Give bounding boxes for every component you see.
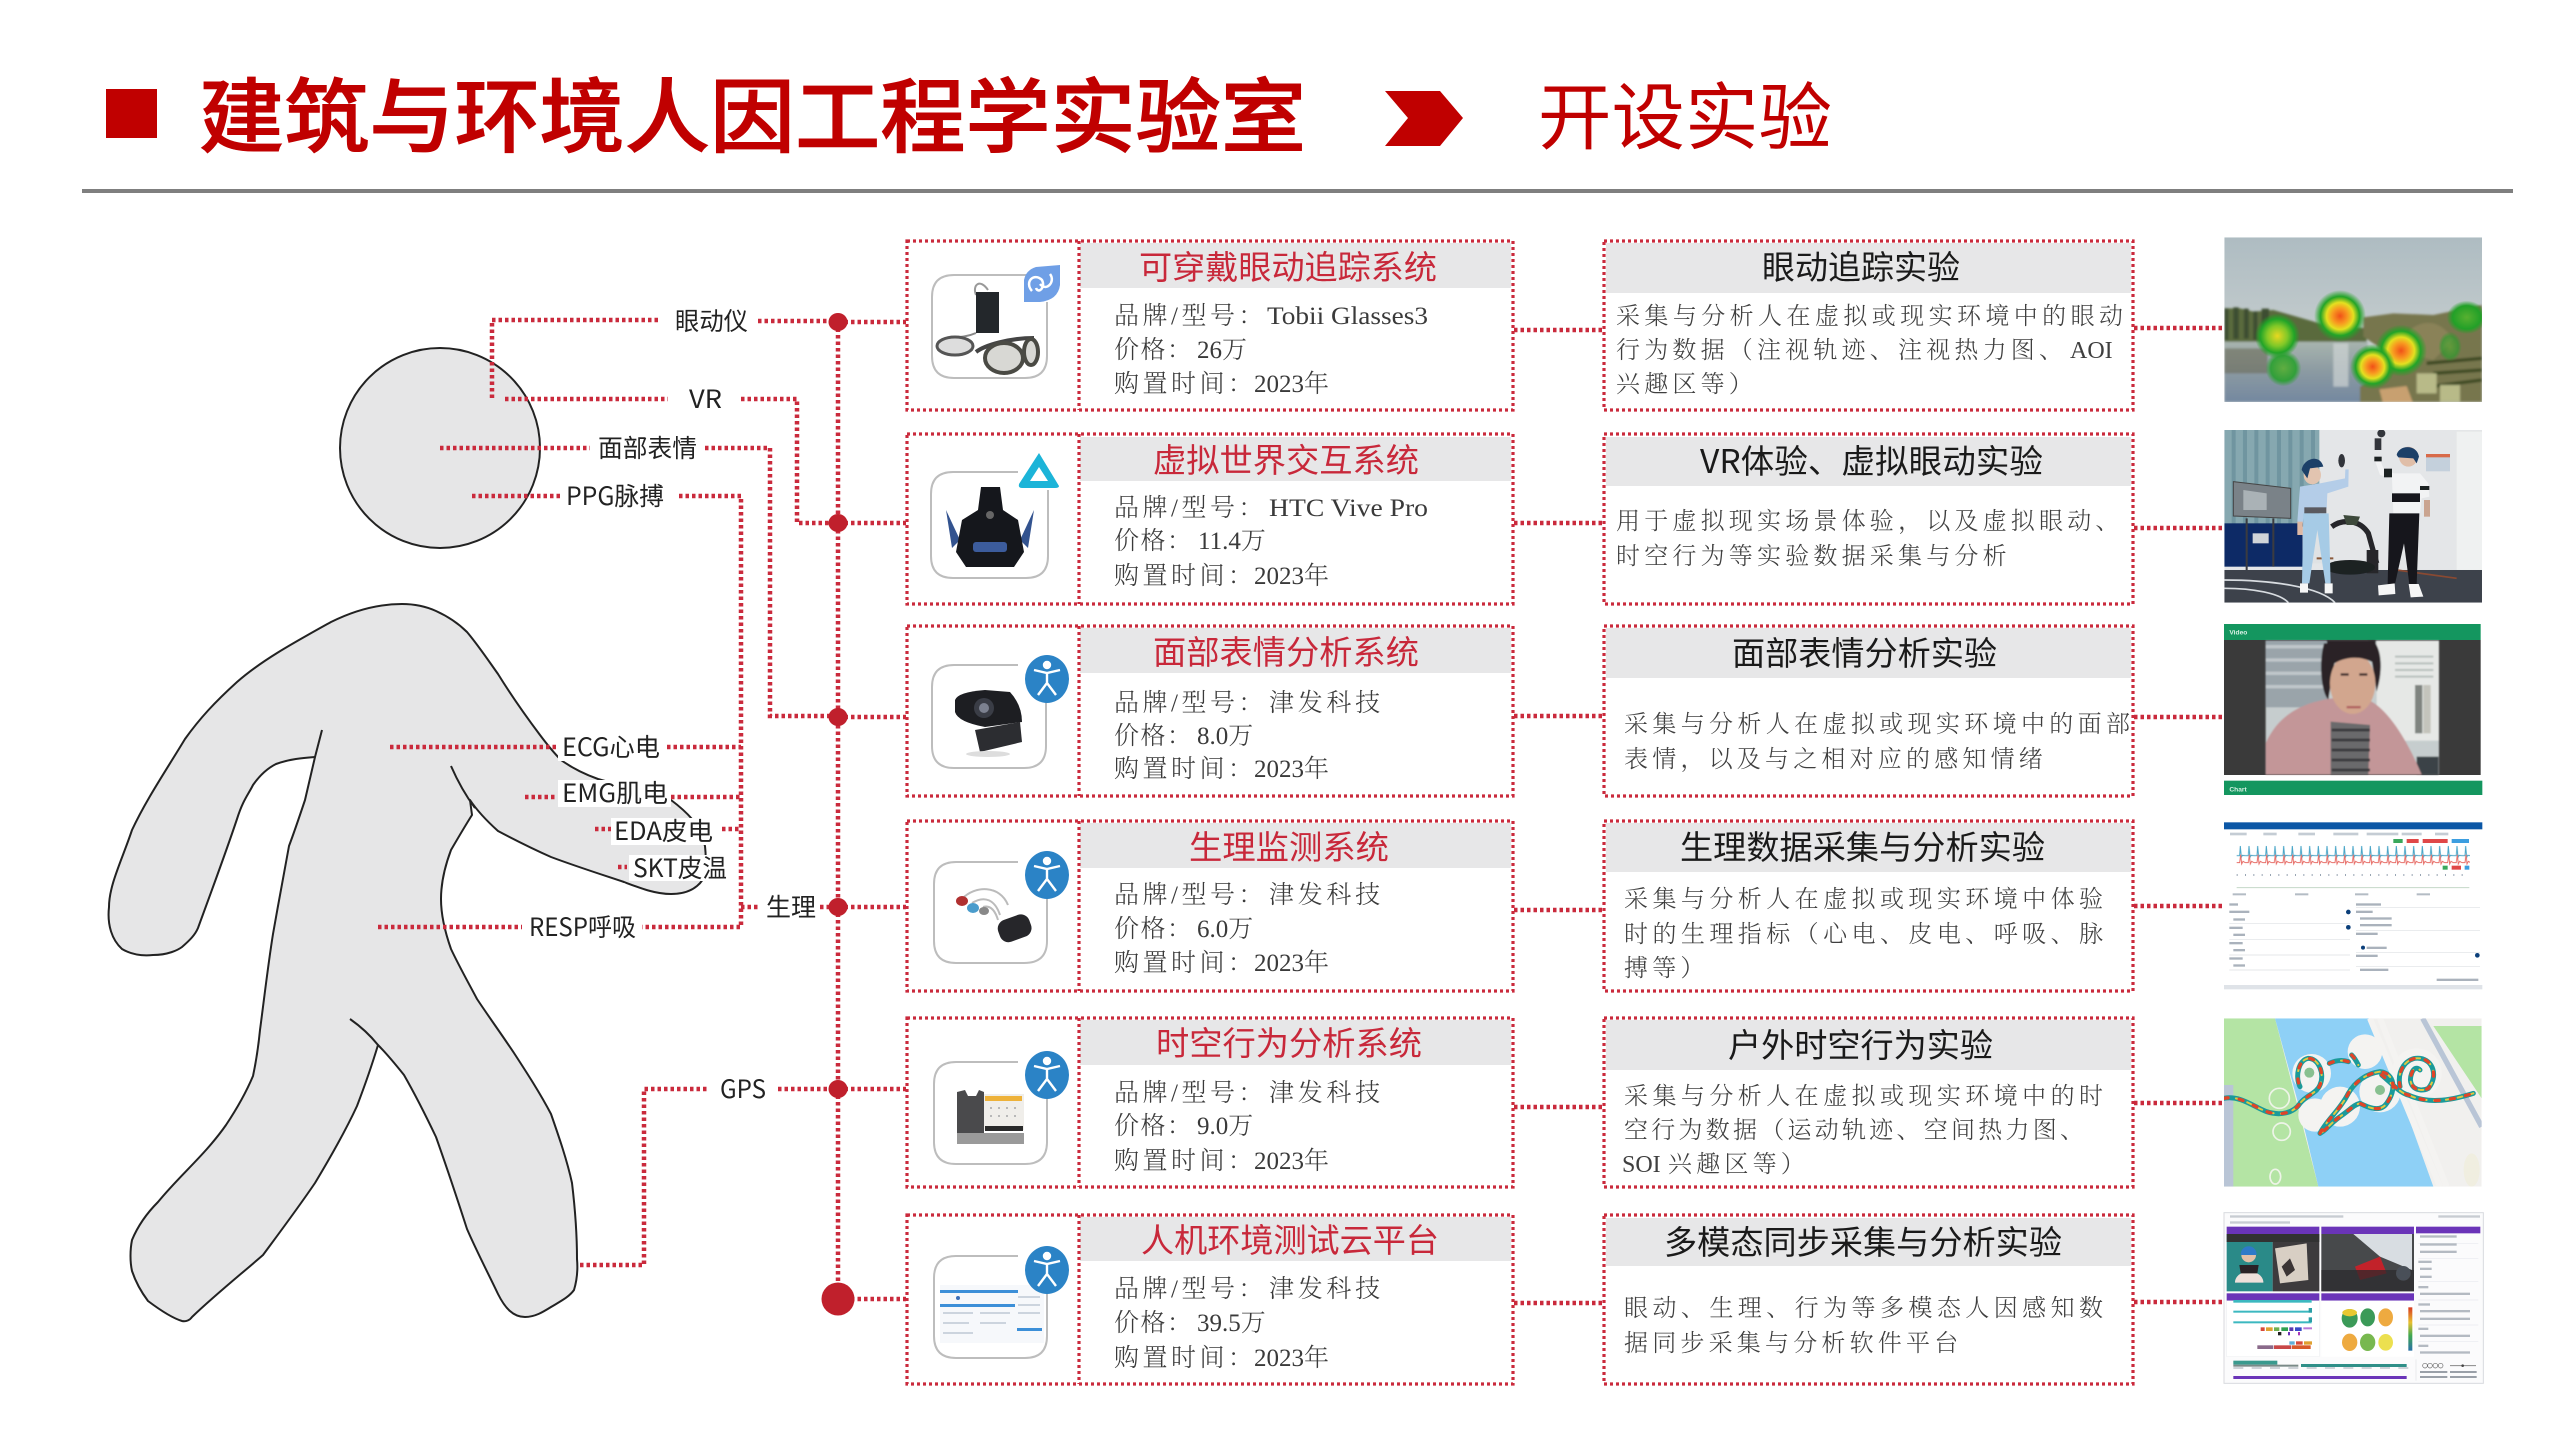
experiment 1 description: 兴趣区等） — [1616, 371, 1757, 398]
device 2 title: 虚拟世界交互系统 — [1153, 434, 1419, 482]
device 4 specs: 2023年 — [1254, 949, 1329, 977]
experiment 1 heading: 眼动追踪实验 — [1762, 241, 1960, 289]
device 1 specs: 品牌/型号： — [1114, 302, 1267, 330]
arm and leg inner lines — [315, 730, 475, 1045]
experiment 5 description: SOI — [1622, 1152, 1661, 1178]
sensor labels: 眼动仪 — [675, 302, 748, 338]
icon: data logger box — [934, 1062, 1047, 1164]
experiment 3 heading: 面部表情分析实验 — [1732, 627, 1997, 675]
device 2 specs: HTC Vive Pro — [1269, 495, 1428, 522]
subtitle: 开设实验 — [1538, 59, 1832, 165]
device 2 specs: 品牌/型号： — [1114, 494, 1267, 522]
image: GPS trajectory map — [2224, 1018, 2482, 1187]
device 1 specs: 价格： — [1114, 336, 1194, 364]
experiment 3 description — [1624, 711, 2130, 773]
device 5 specs: 品牌/型号： — [1114, 1079, 1267, 1107]
device 2 specs: 2023年 — [1254, 562, 1329, 590]
experiment 5 description: 采集与分析人在虚拟或现实环境中的时 — [1624, 1083, 2103, 1110]
screenshot captions: Video — [2229, 630, 2247, 637]
device 6 specs: 39.5万 — [1197, 1310, 1266, 1337]
device 5 specs: 价格： — [1114, 1112, 1194, 1140]
device 3 specs — [1114, 689, 1384, 783]
title bullet square — [106, 89, 157, 138]
device 6 specs: 购置时间： — [1114, 1344, 1257, 1372]
image: facial expression screenshot — [2224, 624, 2482, 795]
device 4 specs: 津发科技 — [1269, 881, 1384, 909]
panel: device 5 spatiotemporal — [907, 1017, 1513, 1187]
device 4 specs: 购置时间： — [1114, 949, 1257, 977]
experiment 1 description: 行为数据（注视轨迹、注视热力图、 — [1616, 337, 2067, 364]
device 1 specs: 购置时间： — [1114, 370, 1257, 398]
experiment 4 heading: 生理数据采集与分析实验 — [1680, 821, 2045, 869]
experiment 2 description: 用于虚拟现实场景体验，以及虚拟眼动、 — [1616, 508, 2124, 535]
device 3 title: 面部表情分析系统 — [1153, 626, 1419, 674]
sensor labels: EDA皮电 — [614, 812, 713, 848]
sensor labels — [529, 302, 816, 1106]
experiment 5 description: 空行为数据（运动轨迹、空间热力图、 — [1624, 1117, 2084, 1144]
panel: device 6 cloud platform — [907, 1214, 1513, 1384]
human body silhouette — [109, 348, 706, 1321]
screenshot captions: Chart — [2229, 786, 2247, 793]
experiment 6 description — [1624, 1295, 2103, 1357]
white label backgrounds — [558, 735, 727, 881]
title divider — [82, 189, 2513, 193]
woman — [2297, 469, 2349, 523]
device 4 title: 生理监测系统 — [1189, 821, 1389, 869]
panel: experiment 5 outdoor — [1604, 1018, 2133, 1187]
experiment 3 description: 采集与分析人在虚拟或现实环境中的面部 — [1624, 711, 2130, 738]
device 6 specs: 品牌/型号： — [1114, 1275, 1267, 1303]
sensor labels: RESP呼吸 — [529, 908, 636, 944]
device 4 specs — [1114, 881, 1384, 977]
panel: experiment 2 VR — [1604, 434, 2133, 604]
device 4 specs: 价格： — [1114, 915, 1194, 943]
panel: device 4 physiological — [907, 821, 1513, 991]
sensor labels: 面部表情 — [598, 429, 697, 465]
device 5 specs — [1114, 1079, 1384, 1175]
experiment 4 description: 时的生理指标（心电、皮电、呼吸、脉 — [1624, 921, 2103, 948]
device 3 specs: 购置时间： — [1114, 755, 1257, 783]
panel: device 1 eye tracker — [907, 241, 1513, 410]
device 6 specs — [1114, 1275, 1384, 1372]
title: 建筑与环境人因工程学实验室 — [199, 53, 1306, 170]
icon: blue link badge — [1024, 265, 1060, 302]
experiment 2 heading: VR体验、虚拟眼动实验 — [1700, 435, 2043, 483]
device 5 specs: 购置时间： — [1114, 1147, 1257, 1175]
device 5 specs: 2023年 — [1254, 1147, 1329, 1175]
icon: physiological sensors — [934, 862, 1047, 963]
icon: human badge — [1025, 851, 1069, 899]
experiment 4 description: 采集与分析人在虚拟或现实环境中体验 — [1624, 886, 2103, 913]
device 1 specs: 2023年 — [1254, 370, 1329, 398]
device 3 specs: 2023年 — [1254, 755, 1329, 783]
device 6 specs: 价格： — [1114, 1309, 1194, 1337]
device 4 specs: 品牌/型号： — [1114, 881, 1267, 909]
panel: device 3 facial expression — [907, 626, 1513, 796]
device 3 specs: 津发科技 — [1269, 689, 1384, 717]
icon: human badge — [1025, 655, 1069, 703]
panel: device 2 VR — [907, 434, 1513, 604]
panel: experiment 4 physiological — [1604, 821, 2133, 991]
experiment 5 description — [1622, 1083, 2103, 1178]
man — [2375, 462, 2429, 513]
experiment 1 description — [1616, 303, 2123, 398]
experiment 6 heading: 多模态同步采集与分析实验 — [1664, 1216, 2062, 1264]
sensor labels: 生理 — [766, 888, 816, 924]
device 5 specs: 9.0万 — [1197, 1113, 1253, 1140]
device 1 specs: Tobii Glasses3 — [1267, 303, 1428, 330]
device 3 specs: 价格： — [1114, 722, 1194, 750]
image: multimodal platform screenshot — [2224, 1213, 2483, 1383]
icon: VR headset — [931, 472, 1048, 578]
device 6 specs: 津发科技 — [1269, 1275, 1384, 1303]
experiment 4 description: 搏等） — [1624, 955, 1709, 982]
screenshot captions — [2229, 630, 2247, 793]
experiment 1 description: AOI — [2070, 338, 2113, 364]
panel: experiment 1 eye tracking — [1604, 241, 2133, 410]
head — [340, 348, 540, 548]
experiment 6 description: 眼动、生理、行为等多模态人因感知数 — [1624, 1295, 2103, 1322]
icon: HTC triangle badge — [1019, 453, 1059, 488]
sensor labels: GPS — [720, 1070, 766, 1106]
device 6 title: 人机环境测试云平台 — [1141, 1214, 1439, 1262]
icon: human badge — [1025, 1246, 1069, 1294]
device 6 specs: 2023年 — [1254, 1344, 1329, 1372]
experiment 5 description: 兴趣区等） — [1668, 1151, 1809, 1178]
sensor labels: ECG心电 — [562, 728, 660, 764]
sensor labels: PPG脉搏 — [566, 477, 664, 513]
panel: experiment 6 multimodal — [1604, 1215, 2133, 1384]
sensor labels: SKT皮温 — [633, 849, 727, 885]
device 1 specs: 26万 — [1197, 337, 1247, 364]
icon: platform screenshot — [934, 1256, 1047, 1358]
image: physiological dashboard screenshot — [2224, 822, 2482, 989]
experiment 2 description — [1616, 508, 2124, 570]
panel: experiment 3 facial — [1604, 626, 2133, 796]
device 2 specs: 价格： — [1114, 527, 1194, 555]
experiment 3 description: 表情，以及与之相对应的感知情绪 — [1624, 746, 2047, 773]
device 5 specs: 津发科技 — [1269, 1079, 1384, 1107]
experiment 4 description — [1624, 886, 2103, 982]
device 2 specs — [1114, 494, 1428, 590]
experiment 1 description: 采集与分析人在虚拟或现实环境中的眼动 — [1616, 303, 2123, 330]
device 2 specs: 购置时间： — [1114, 562, 1257, 590]
device 1 title: 可穿戴眼动追踪系统 — [1139, 241, 1437, 289]
sensor labels: VR — [689, 380, 722, 416]
torso, arms and legs — [109, 604, 706, 1321]
device 2 specs: 11.4万 — [1198, 528, 1266, 555]
device 5 title: 时空行为分析系统 — [1156, 1017, 1422, 1065]
icon: webcam — [932, 665, 1046, 768]
experiment 2 description: 时空行为等实验数据采集与分析 — [1616, 543, 2011, 570]
device 3 specs: 品牌/型号： — [1114, 689, 1267, 717]
junction dots — [822, 313, 854, 1316]
experiment 6 description: 据同步采集与分析软件平台 — [1624, 1330, 1962, 1357]
icon: human badge — [1025, 1051, 1069, 1099]
device 1 specs — [1114, 302, 1428, 398]
arrow: chevron — [1385, 91, 1463, 146]
sensor labels: EMG肌电 — [562, 774, 668, 810]
experiment 5 heading: 户外时空行为实验 — [1728, 1019, 1993, 1067]
device 3 specs: 8.0万 — [1197, 723, 1253, 750]
image: eye tracking heat map — [2224, 237, 2487, 402]
connector network — [378, 320, 2224, 1303]
device 4 specs: 6.0万 — [1197, 916, 1253, 943]
image: VR experience photo — [2224, 429, 2482, 603]
icon: eye tracking glasses — [932, 275, 1047, 378]
robot platform — [2332, 522, 2377, 563]
